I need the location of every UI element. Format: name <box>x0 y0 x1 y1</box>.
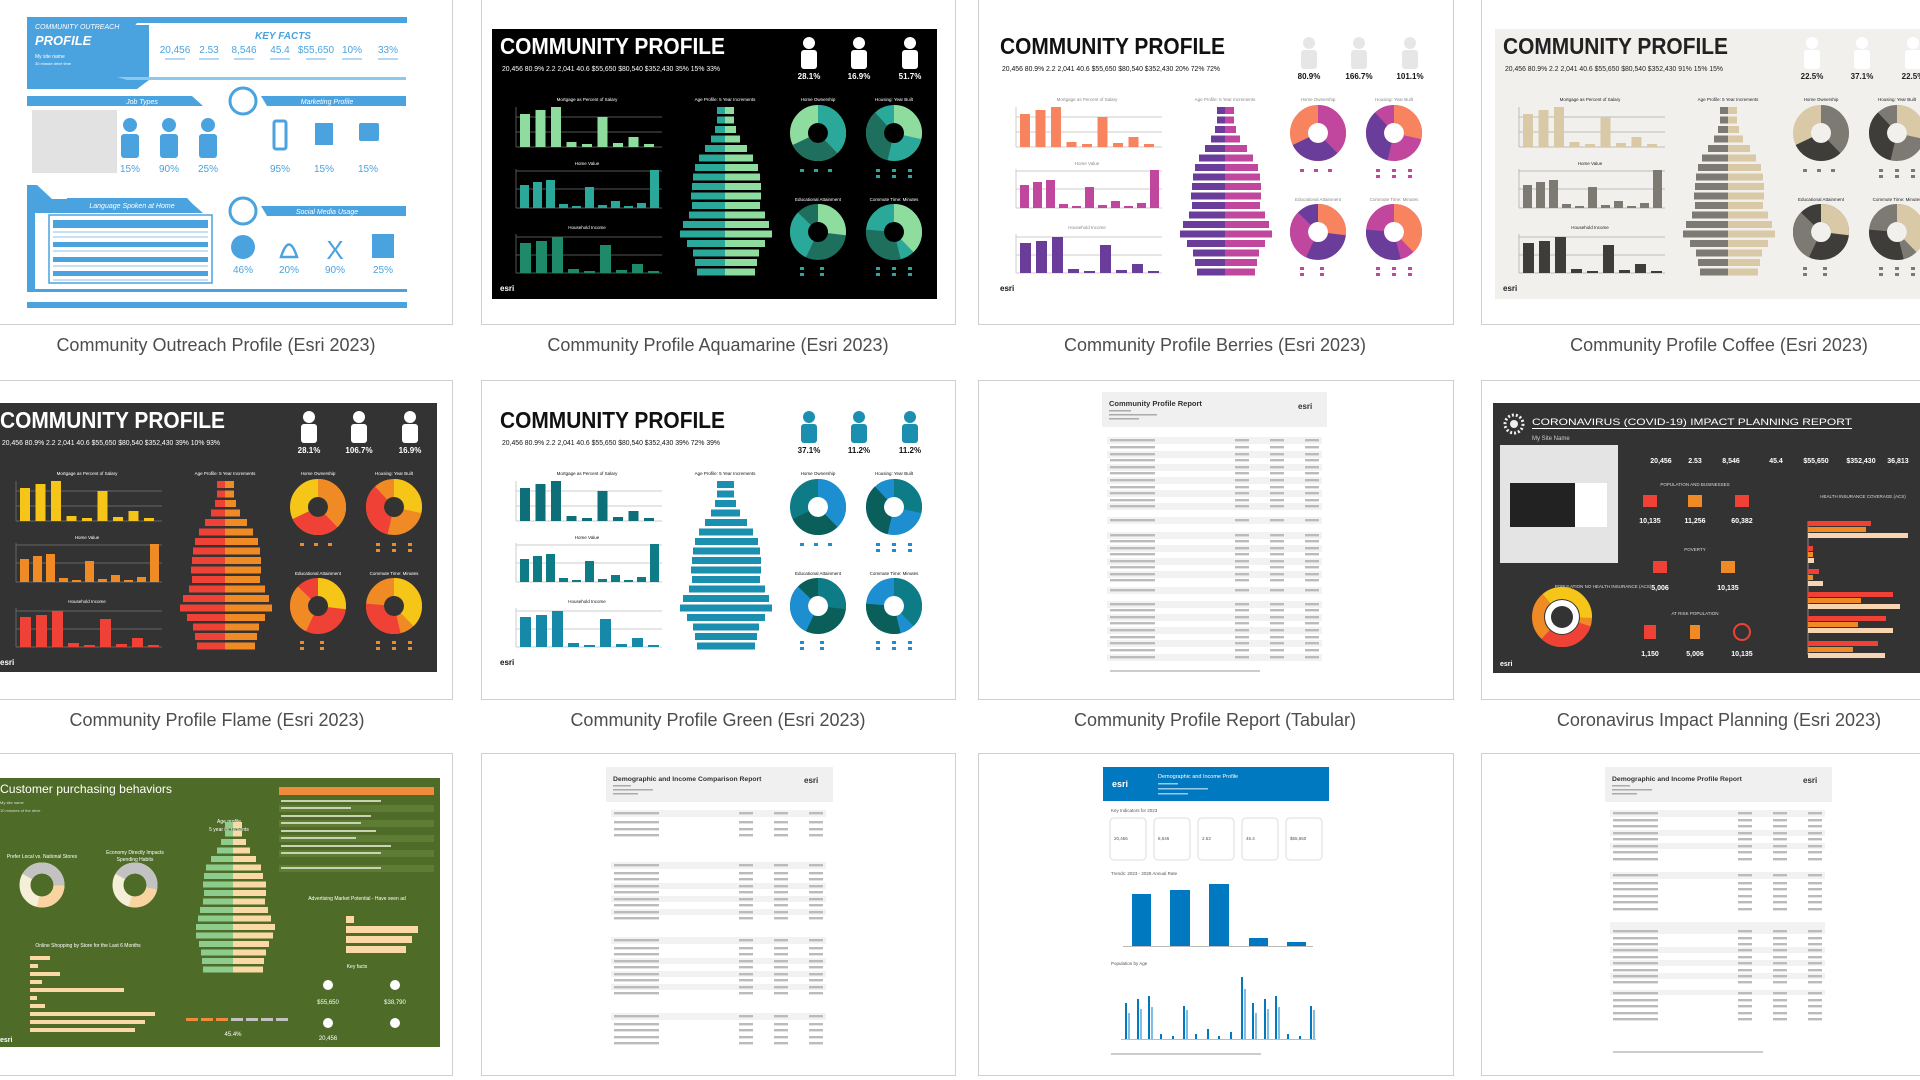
card: community outreach profile <box>0 0 453 325</box>
thumbnail: community profile flame <box>0 403 437 672</box>
label: berries: Community Profile Berries (Esri 2023) <box>1064 335 1366 355</box>
key facts: 20,456 <box>319 1036 338 1042</box>
thumbnail: community profile coffee: Housing: Year Built <box>1878 97 1917 102</box>
thumbnail: community profile green: esri <box>500 658 514 667</box>
key facts: 20,456 <box>160 45 191 56</box>
thumbnail: customer purchasing behaviors: Prefer Local vs. National Stores <box>7 854 78 860</box>
thumbnail: community profile berries: Age Profile: 5 Year Increments <box>1195 97 1256 102</box>
thumbnail: community profile berries: Household Income <box>1068 225 1106 230</box>
online shopping bars <box>30 956 155 1032</box>
thumbnail: customer purchasing behaviors <box>0 778 440 1047</box>
thumbnail: community profile flame: 20,456 80.9% 2.2 2,041 40.6 $55,650 $80,540 $352,430 39% 10% 93% <box>2 438 220 447</box>
covid title <box>1505 415 1852 442</box>
thumbnail: community profile aquamarine: esri <box>500 284 514 293</box>
social media section: X <box>326 235 344 265</box>
header band <box>27 17 407 89</box>
thumbnail: customer purchasing behaviors: Key facts <box>347 964 368 970</box>
thumbnail: community profile green: COMMUNITY PROFILE <box>500 407 725 433</box>
thumbnail: demographic and income profile: Population by Age <box>1111 961 1148 966</box>
key facts <box>160 31 398 60</box>
thumbnail: community profile green: 20,456 80.9% 2.2 2,041 40.6 $55,650 $80,540 $352,430 39% 72% 39% <box>502 438 720 447</box>
section bars: Marketing Profile <box>301 99 353 106</box>
thumbnail: customer purchasing behaviors: Customer purchasing behaviors <box>0 782 172 796</box>
online spending table <box>279 787 434 872</box>
thumbnail: community profile aquamarine: Home Ownership <box>801 97 836 102</box>
header band: PROFILE <box>35 33 92 48</box>
thumbnail: demographic and income profile: 20,456 <box>1114 836 1128 841</box>
thumbnail: community profile berries <box>1000 33 1424 293</box>
job & marketing percents: 15% <box>314 164 334 175</box>
icons & numbers: 1,150 <box>1641 651 1659 658</box>
thumbnail: community profile berries: esri <box>1000 284 1014 293</box>
thumbnail: community profile coffee: 37.1% <box>1851 72 1873 81</box>
key numbers: $55,650 <box>1803 458 1829 465</box>
thumbnail: community profile coffee: Home Ownership <box>1804 97 1839 102</box>
thumbnail: community profile aquamarine: Mortgage as Percent of Salary <box>557 97 618 102</box>
section bars: Job Types <box>125 99 158 106</box>
social media section: 25% <box>373 265 393 276</box>
thumbnail: community profile flame: Mortgage as Percent of Salary <box>57 471 118 476</box>
thumbnail: community profile green: Home Value <box>575 535 600 540</box>
thumbnail: demographic and income comparison report <box>606 767 833 1044</box>
icons & numbers: 5,006 <box>1651 585 1669 592</box>
thumbnail: community profile berries: Home Ownership <box>1301 97 1336 102</box>
icons & numbers <box>1555 482 1906 658</box>
thumbnail: community profile coffee: COMMUNITY PROFILE <box>1503 33 1728 59</box>
thumbnail: community profile flame: 28.1% <box>298 446 320 455</box>
key facts: $55,650 <box>298 45 335 56</box>
key facts <box>224 1000 406 1042</box>
thumbnail: demographic and income profile: 8,546 <box>1158 836 1170 841</box>
label: green: Community Profile Green (Esri 2023) <box>570 710 866 730</box>
thumbnail: community profile coffee: 20,456 80.9% 2.2 2,041 40.6 $55,650 $80,540 $352,430 91% 15% 15% <box>1505 64 1723 73</box>
thumbnail: community profile berries: Home Value <box>1075 161 1100 166</box>
label: flame: Community Profile Flame (Esri 2023) <box>69 710 365 730</box>
card: flame <box>0 380 453 700</box>
key facts: $38,790 <box>384 1000 406 1006</box>
thumbnail: customer purchasing behaviors: Age profile <box>217 819 241 825</box>
social media section <box>230 198 406 276</box>
key facts: 10% <box>342 45 362 56</box>
key facts: 45.4 <box>270 45 290 56</box>
thumbnail: community profile green: 11.2% <box>899 446 921 455</box>
thumbnail: community profile aquamarine: 28.1% <box>798 72 820 81</box>
map <box>1500 445 1618 563</box>
key numbers: $352,430 <box>1846 458 1876 465</box>
thumbnail: customer purchasing behaviors: My site name <box>0 800 25 805</box>
card: demographic and income comparison report <box>481 753 956 1076</box>
thumbnail: community profile coffee: Educational Attainment <box>1798 197 1845 202</box>
thumbnail: community profile flame: Commute Time: Minutes <box>370 571 419 576</box>
health insurance bar chart <box>1808 521 1908 658</box>
thumbnail: customer purchasing behaviors: Spending Habits <box>117 857 154 863</box>
thumbnail: demographic and income profile: esri <box>1112 779 1128 789</box>
thumbnail: community profile berries: 101.1% <box>1396 72 1424 81</box>
icons & numbers: 60,382 <box>1731 518 1753 525</box>
thumbnail: community profile green: 37.1% <box>798 446 820 455</box>
icons & numbers: 11,256 <box>1684 518 1706 525</box>
thumbnail: customer purchasing behaviors: Online Shopping by Store for the Last 6 Months <box>35 943 141 949</box>
icons & numbers: POPULATION NO HEALTH INSURANCE (ACS) <box>1555 584 1652 589</box>
thumbnail: community profile coffee: Commute Time: Minutes <box>1873 197 1920 202</box>
key numbers <box>1650 458 1909 465</box>
icons & numbers: 10,135 <box>1639 518 1661 525</box>
thumbnail: community profile report tabular: Community Profile Report <box>1109 399 1202 408</box>
icons & numbers: HEALTH INSURANCE COVERAGE (ACS) <box>1820 494 1906 499</box>
map <box>32 110 117 173</box>
thumbnail: community profile coffee: Home Value <box>1578 161 1603 166</box>
thumbnail: demographic and income profile: 45.4 <box>1246 836 1255 841</box>
thumbnail: community profile aquamarine: 20,456 80.9% 2.2 2,041 40.6 $55,650 $80,540 $352,430 35% 15% 33% <box>502 64 720 73</box>
thumbnail: community profile flame: Housing: Year Built <box>375 471 414 476</box>
social media section: Social Media Usage <box>296 209 358 216</box>
thumbnail: community profile flame: Household Income <box>68 599 106 604</box>
thumbnail: community profile flame: Home Value <box>75 535 100 540</box>
thumbnail: community profile aquamarine: Housing: Year Built <box>875 97 914 102</box>
header band: COMMUNITY OUTREACH <box>35 24 120 31</box>
key facts: 33% <box>378 45 398 56</box>
card: green <box>481 380 956 700</box>
card: tabular report <box>978 380 1454 700</box>
job & marketing percents: 15% <box>120 164 140 175</box>
thumbnail: community profile coffee: Age Profile: 5 Year Increments <box>1698 97 1759 102</box>
covid title: CORONAVIRUS (COVID-19) IMPACT PLANNING REPORT <box>1532 417 1852 428</box>
thumbnail: community profile coffee <box>1495 29 1920 299</box>
thumbnail: community profile berries: 20,456 80.9% 2.2 2,041 40.6 $55,650 $80,540 $352,430 20% 72% 72% <box>1002 64 1220 73</box>
thumbnail: community profile green <box>500 407 922 667</box>
thumbnail: community profile aquamarine: Home Value <box>575 161 600 166</box>
header band: My site name <box>35 54 65 60</box>
thumbnail: community profile coffee: Mortgage as Percent of Salary <box>1560 97 1621 102</box>
thumbnail: customer purchasing behaviors: Economy Directly Impacts <box>106 850 164 856</box>
thumbnail: community profile aquamarine: Age Profile: 5 Year Increments <box>695 97 756 102</box>
job & marketing percents: 25% <box>198 164 218 175</box>
key facts: 45.4% <box>224 1032 242 1038</box>
key numbers: 45.4 <box>1769 458 1783 465</box>
thumbnail: community profile coffee: esri <box>1503 284 1517 293</box>
thumbnail: community profile berries: Commute Time: Minutes <box>1370 197 1419 202</box>
thumbnail: community profile green: 11.2% <box>848 446 870 455</box>
thumbnail: community profile aquamarine <box>492 29 937 299</box>
thumbnail: community profile aquamarine: Household Income <box>568 225 606 230</box>
icons & numbers: POVERTY <box>1684 547 1706 552</box>
thumbnail: demographic and income profile report: Demographic and Income Profile Report <box>1612 776 1743 783</box>
card: berries <box>978 0 1454 325</box>
social media section: 90% <box>325 265 345 276</box>
card: demographic and income profile (blue) <box>978 753 1454 1076</box>
icons & numbers: POPULATION AND BUSINESSES <box>1660 482 1730 487</box>
icons & numbers: 10,135 <box>1717 585 1739 592</box>
thumbnail: community profile green: Household Income <box>568 599 606 604</box>
label: tabular: Community Profile Report (Tabular) <box>1074 710 1356 730</box>
icons & numbers: 5,006 <box>1686 651 1704 658</box>
thumbnail: community profile berries: 80.9% <box>1298 72 1320 81</box>
label: coffee: Community Profile Coffee (Esri 2023) <box>1570 335 1868 355</box>
header band: 30 minute drive time <box>35 61 72 66</box>
thumbnail: community profile green: Home Ownership <box>801 471 836 476</box>
job & marketing percents <box>120 164 378 175</box>
section bars <box>27 88 406 114</box>
thumbnail: demographic and income profile: $55,650 <box>1290 836 1307 841</box>
thumbnail: customer purchasing behaviors: Advertising Market Potential - Have seen ad <box>308 896 406 902</box>
thumbnail: community profile report tabular <box>1102 392 1327 672</box>
social media section: 46% <box>233 265 253 276</box>
thumbnail: community profile flame: Age Profile: 5 Year Increments <box>195 471 256 476</box>
thumbnail: demographic and income comparison report: esri <box>804 776 818 785</box>
card: demographic and income profile report <box>1481 753 1920 1076</box>
card: coffee <box>1481 0 1920 325</box>
thumbnail: community profile berries: Mortgage as Percent of Salary <box>1057 97 1118 102</box>
thumbnail: community profile flame: Home Ownership <box>301 471 336 476</box>
thumbnail: community profile green: Educational Attainment <box>795 571 842 576</box>
key numbers: 36,813 <box>1887 458 1909 465</box>
thumbnail: community profile green: Age Profile: 5 Year Increments <box>695 471 756 476</box>
thumbnail: community profile report tabular: esri <box>1298 402 1312 411</box>
label: outreach: Community Outreach Profile (Esri 2023) <box>56 335 376 355</box>
job icons <box>121 118 379 158</box>
thumbnail: community profile flame: 16.9% <box>399 446 421 455</box>
thumbnail: community profile berries: 166.7% <box>1345 72 1373 81</box>
thumbnail: community outreach profile <box>27 17 407 308</box>
advertising bars <box>346 916 418 953</box>
thumbnail: demographic and income profile: 2.53 <box>1202 836 1211 841</box>
label: coronavirus: Coronavirus Impact Planning (Esri 2023) <box>1557 710 1881 730</box>
thumbnail: demographic and income profile <box>1103 767 1329 1055</box>
job & marketing percents: 95% <box>270 164 290 175</box>
social media section: 20% <box>279 265 299 276</box>
key facts: 8,546 <box>231 45 257 56</box>
thumbnail: demographic and income comparison report: Demographic and Income Comparison Report <box>613 776 762 783</box>
icons & numbers: AT RISK POPULATION <box>1671 611 1719 616</box>
thumbnail: demographic and income profile: Demographic and Income Profile <box>1158 774 1238 780</box>
thumbnail: customer purchasing behaviors: 10 minutes of the drive <box>0 808 41 813</box>
thumbnail: community profile aquamarine: Commute Time: Minutes <box>870 197 919 202</box>
thumbnail: community profile coffee: Household Income <box>1571 225 1609 230</box>
thumbnail: community profile green: Housing: Year Built <box>875 471 914 476</box>
thumbnail: demographic and income profile report: esri <box>1803 776 1817 785</box>
age pyramid <box>196 822 233 972</box>
thumbnail: demographic and income profile report <box>1605 767 1832 1053</box>
thumbnail: community profile flame: Educational Attainment <box>295 571 342 576</box>
key numbers: 20,456 <box>1650 458 1672 465</box>
thumbnail: coronavirus impact planning: esri <box>1500 661 1513 668</box>
key numbers: 8,546 <box>1722 458 1740 465</box>
thumbnail: community profile flame: COMMUNITY PROFILE <box>0 407 225 433</box>
thumbnail: community profile aquamarine: Educational Attainment <box>795 197 842 202</box>
icons & numbers: 10,135 <box>1731 651 1753 658</box>
thumbnail: coronavirus impact planning <box>1493 403 1920 673</box>
card: aquamarine <box>481 0 956 325</box>
covid title: My Site Name <box>1532 436 1570 442</box>
thumbnail: demographic and income profile: Key Indicators for 2023 <box>1111 808 1158 813</box>
language section: Language Spoken at Home <box>89 203 175 210</box>
thumbnail: customer purchasing behaviors: esri <box>0 1037 13 1044</box>
key numbers: 2.53 <box>1688 458 1702 465</box>
thumbnail: customer purchasing behaviors: 5 year increments <box>209 827 249 833</box>
donut: no health insurance <box>1528 583 1596 651</box>
job & marketing percents: 90% <box>159 164 179 175</box>
thumbnail: community profile flame: esri <box>0 658 14 667</box>
thumbnail: community profile berries: Housing: Year Built <box>1375 97 1414 102</box>
thumbnail: demographic and income profile: Trends: 2023 - 2028 Annual Rate <box>1111 871 1178 876</box>
thumbnail: community profile aquamarine: 51.7% <box>899 72 921 81</box>
thumbnail: community profile berries: COMMUNITY PROFILE <box>1000 33 1225 59</box>
thumbnail: community profile coffee: 22.5% <box>1801 72 1823 81</box>
card: customer purchasing <box>0 753 453 1076</box>
job & marketing percents: 15% <box>358 164 378 175</box>
thumbnail: community profile berries: Educational Attainment <box>1295 197 1342 202</box>
language section <box>27 185 407 292</box>
card: coronavirus <box>1481 380 1920 700</box>
thumbnail: community profile flame: 106.7% <box>345 446 373 455</box>
key facts: KEY FACTS <box>255 31 311 42</box>
thumbnail: community profile green: Commute Time: Minutes <box>870 571 919 576</box>
key facts: $55,650 <box>317 1000 340 1006</box>
thumbnail: community profile green: Mortgage as Percent of Salary <box>557 471 618 476</box>
key facts: 2.53 <box>199 45 219 56</box>
label: aquamarine: Community Profile Aquamarine (Esri 2023) <box>547 335 889 355</box>
donuts <box>19 862 158 908</box>
thumbnail: community profile aquamarine: 16.9% <box>848 72 870 81</box>
thumbnail: community profile aquamarine: COMMUNITY PROFILE <box>500 33 725 59</box>
